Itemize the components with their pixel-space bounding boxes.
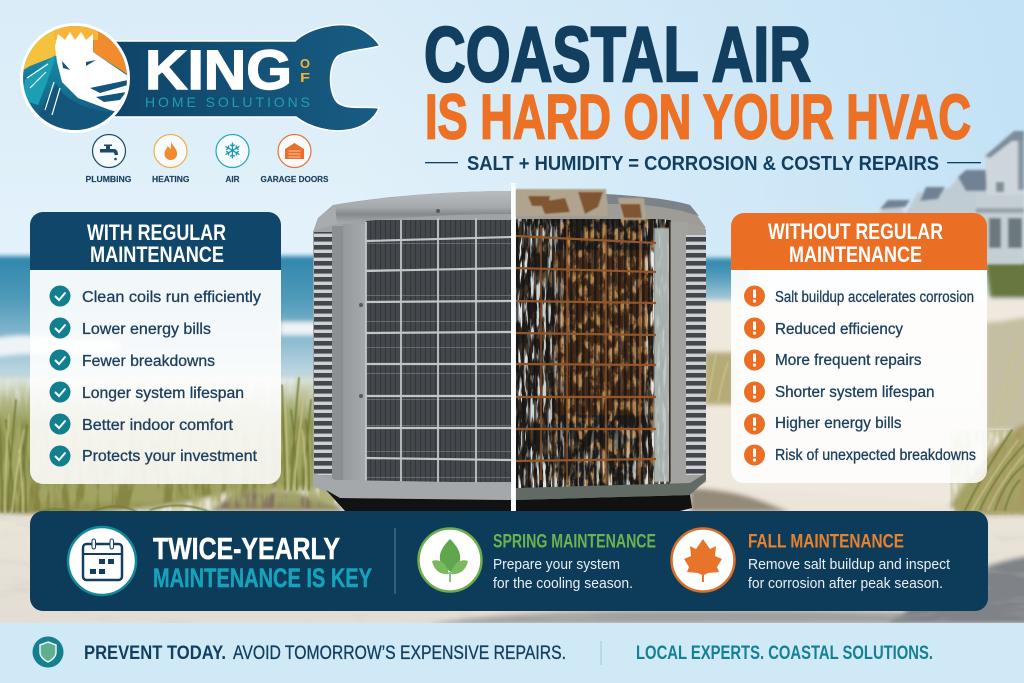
- title: COASTAL AIR: [424, 10, 811, 98]
- icon labels: HEATING: [152, 175, 190, 184]
- footer message: [84, 643, 566, 664]
- check list: Better indoor comfort: [82, 417, 234, 434]
- warning list: [744, 286, 976, 466]
- panel header: MAINTENANCE: [90, 242, 224, 267]
- check list: [50, 286, 261, 466]
- lion emblem: [20, 20, 130, 136]
- rusted grille rods: [516, 225, 656, 485]
- check list: Longer system lifespan: [82, 385, 244, 402]
- footer message: PREVENT TODAY.: [84, 643, 226, 664]
- icon labels: AIR: [226, 175, 240, 184]
- heading: twice-yearly: MAINTENANCE IS KEY: [153, 563, 372, 593]
- fall text: for corrosion after peak season.: [748, 575, 943, 592]
- fall text: Remove salt buildup and inspect: [748, 556, 951, 573]
- AC unit split comparison: [313, 183, 706, 511]
- icon labels: [86, 175, 329, 184]
- heading: twice-yearly: [153, 531, 372, 593]
- subtitle: SALT + HUMIDITY = CORROSION & COSTLY REPAIRS: [467, 153, 939, 175]
- icon: spring leaf: [418, 528, 482, 592]
- wrench badge: F: [300, 71, 310, 85]
- footer message: AVOID TOMORROW’S EXPENSIVE REPAIRS.: [233, 643, 566, 664]
- fall text: FALL MAINTENANCE: [748, 532, 904, 552]
- clean half of unit: [313, 191, 511, 511]
- wrench badge: [110, 25, 380, 131]
- dune grass: [0, 340, 1024, 515]
- spring text: [493, 532, 656, 592]
- warning list: Salt buildup accelerates corrosion: [775, 289, 974, 306]
- warning list: More frequent repairs: [775, 352, 922, 369]
- logo: King of Home Solutions: [20, 20, 380, 184]
- warning list: Reduced efficiency: [775, 321, 903, 338]
- footer strip: [0, 623, 1024, 683]
- panel header: [731, 213, 987, 270]
- icon: air: [216, 134, 249, 168]
- wrench badge: KING: [145, 38, 292, 101]
- icon: fall leaf: [672, 528, 734, 592]
- icon: shield: [32, 636, 64, 668]
- panel header: MAINTENANCE: [789, 242, 922, 267]
- check list: Lower energy bills: [82, 321, 211, 338]
- icon: heating: [154, 134, 187, 168]
- spring text: for the cooling season.: [493, 575, 633, 592]
- icon: air: ❄: [223, 140, 242, 164]
- spring text: SPRING MAINTENANCE: [493, 532, 656, 552]
- panel: without regular maintenance: [731, 213, 987, 483]
- heading: twice-yearly: TWICE-YEARLY: [153, 531, 340, 566]
- icon labels: PLUMBING: [86, 175, 132, 184]
- clean grille rods: [366, 218, 511, 488]
- check list: Protects your investment: [82, 448, 258, 465]
- icon: plumbing: [92, 134, 126, 168]
- icon labels: GARAGE DOORS: [260, 175, 329, 184]
- beach houses: [878, 131, 1024, 264]
- footer tagline: LOCAL EXPERTS. COASTAL SOLUTIONS.: [636, 643, 933, 664]
- wrench badge: HOME SOLUTIONS: [145, 94, 310, 110]
- check list: Fewer breakdowns: [82, 353, 215, 370]
- warning list: Risk of unexpected breakdowns: [775, 447, 976, 464]
- spring text: Prepare your system: [493, 556, 620, 573]
- panel header: [30, 212, 281, 270]
- maintenance band: [30, 511, 988, 611]
- corroded half of unit: [516, 189, 706, 511]
- panel header: WITHOUT REGULAR: [768, 219, 943, 244]
- icon: garage doors: [278, 134, 311, 168]
- panel header: WITH REGULAR: [87, 220, 226, 245]
- wrench badge: O: [300, 57, 310, 71]
- title: [424, 10, 971, 152]
- fall text: [748, 532, 951, 592]
- warning list: Shorter system lifespan: [775, 384, 934, 401]
- panel: with regular maintenance: [30, 212, 281, 484]
- icon: calendar: [68, 527, 136, 595]
- warning list: Higher energy bills: [775, 415, 902, 432]
- check list: Clean coils run efficiently: [82, 289, 261, 306]
- centre divider: [511, 183, 516, 511]
